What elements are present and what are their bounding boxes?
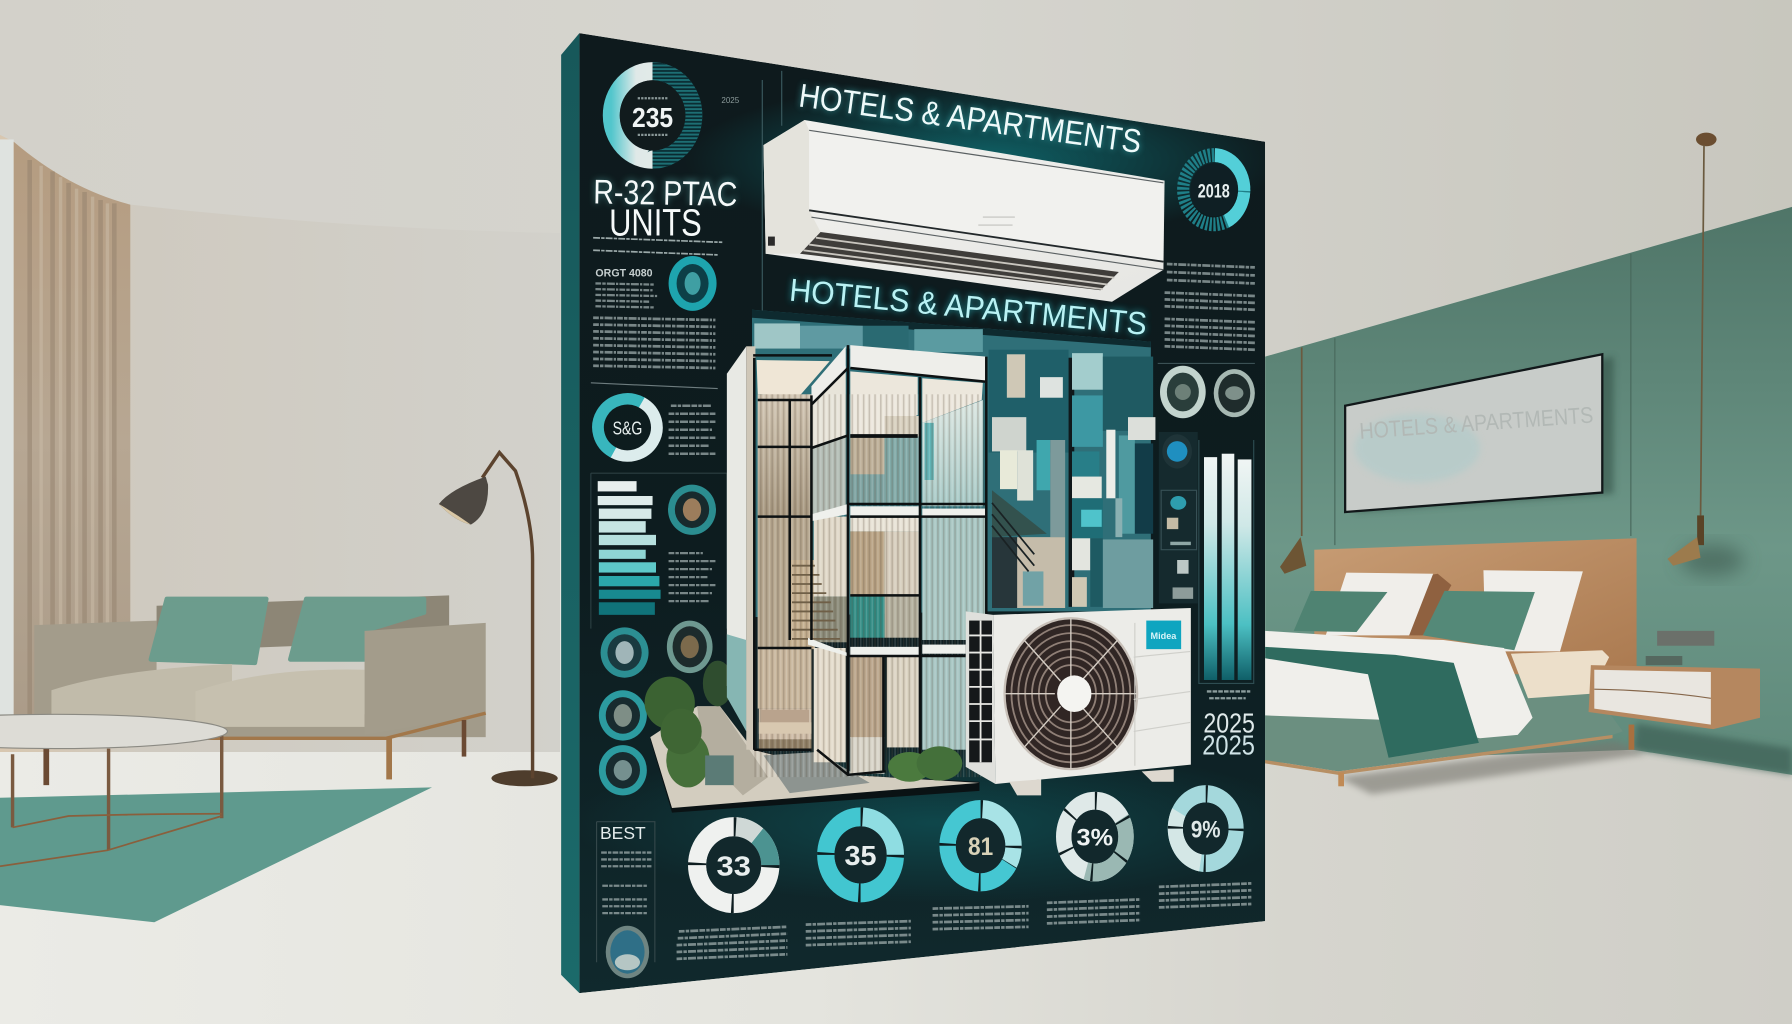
bar list caption	[669, 553, 715, 601]
year labels	[1202, 691, 1255, 760]
left donut chart: S&G	[613, 417, 642, 438]
city collage background	[752, 310, 1155, 617]
coffee table	[0, 714, 227, 866]
small top label: 2025	[721, 96, 740, 105]
header divider	[762, 71, 782, 331]
donut chart 5: 9%	[1191, 817, 1221, 844]
building interior	[746, 346, 986, 777]
right icon circles	[1160, 366, 1255, 418]
outdoor condenser unit	[966, 608, 1191, 795]
curtain	[0, 139, 130, 745]
donut chart 5	[1171, 788, 1241, 869]
nightstand and switch	[1589, 631, 1760, 750]
donut 4 caption	[1047, 899, 1141, 923]
bottom left column: BEST	[600, 823, 646, 843]
interior sofa	[759, 710, 811, 734]
donut chart 2	[826, 817, 895, 893]
building side wall	[727, 346, 746, 731]
donut chart 4	[1052, 788, 1137, 886]
top right donut chart: 2018	[1198, 181, 1230, 203]
white slabs	[808, 345, 986, 656]
bedroom wall panel lines and art	[1335, 254, 1631, 545]
icon: teal badge	[669, 256, 717, 311]
bedroom wall panel lines and art: HOTELS & APARTMENTS	[1359, 402, 1594, 444]
air conditioner indoor unit	[763, 120, 1165, 302]
ground plaza	[650, 706, 979, 813]
headline: hotels and apartments upper: HOTELS & APARTMENTS	[797, 78, 1144, 161]
donut chart 3: 81	[968, 833, 993, 861]
top left donut chart: 235	[632, 102, 673, 133]
wall lamps	[1280, 133, 1744, 576]
product title: UNITS	[609, 201, 702, 243]
front bush	[888, 746, 962, 782]
left donut caption	[669, 406, 715, 454]
left column text	[591, 238, 722, 389]
side panel seams	[1134, 623, 1191, 766]
product title: R-32 PTAC	[593, 173, 737, 211]
donut chart 1: 33	[717, 850, 751, 881]
brand logo box	[1146, 621, 1181, 649]
headline: hotels and apartments lower: HOTELS & APARTMENTS	[788, 272, 1149, 342]
left donut chart	[592, 393, 663, 462]
product title	[591, 176, 738, 236]
rug	[0, 787, 432, 922]
building scene	[645, 345, 986, 813]
donut 2 caption	[806, 921, 911, 945]
donut chart 4: 3%	[1077, 825, 1113, 852]
fan grille	[1005, 618, 1137, 769]
floor lamp	[439, 453, 558, 786]
year labels: 2025	[1203, 708, 1255, 739]
donut 3 caption	[933, 906, 1029, 929]
donut 5 caption	[1159, 883, 1251, 907]
brand logo box: Midea	[1150, 631, 1177, 641]
planter box	[705, 755, 734, 785]
headline: hotels and apartments upper: HOTELS & APARTMENTS	[797, 78, 1144, 161]
right side icons column	[1159, 432, 1254, 683]
poster board side face	[561, 33, 579, 993]
product title: R-32 PTAC	[593, 173, 738, 214]
right column text blocks	[1158, 264, 1255, 363]
top right donut chart	[1181, 153, 1246, 227]
donut chart 1	[688, 817, 780, 914]
donut 1 caption	[677, 927, 787, 959]
bed	[1265, 538, 1646, 794]
panel: bar list	[591, 473, 727, 629]
bottom left column	[597, 822, 655, 978]
headline: hotels and apartments lower: HOTELS & APARTMENTS	[788, 272, 1149, 342]
icon: bronze badge	[668, 485, 716, 535]
left column text: ORGT 4080	[595, 268, 653, 280]
icon circles	[599, 621, 713, 795]
black window frames	[753, 345, 986, 775]
top left donut chart	[611, 71, 694, 160]
sofa	[34, 595, 486, 785]
shrubs	[645, 661, 733, 787]
donut chart 3	[939, 800, 1022, 892]
vertical bar chart	[1204, 454, 1251, 680]
year labels: 2025	[1202, 729, 1255, 760]
staircase	[792, 566, 840, 639]
poster board	[571, 33, 1303, 993]
donut chart 2: 35	[845, 840, 877, 871]
